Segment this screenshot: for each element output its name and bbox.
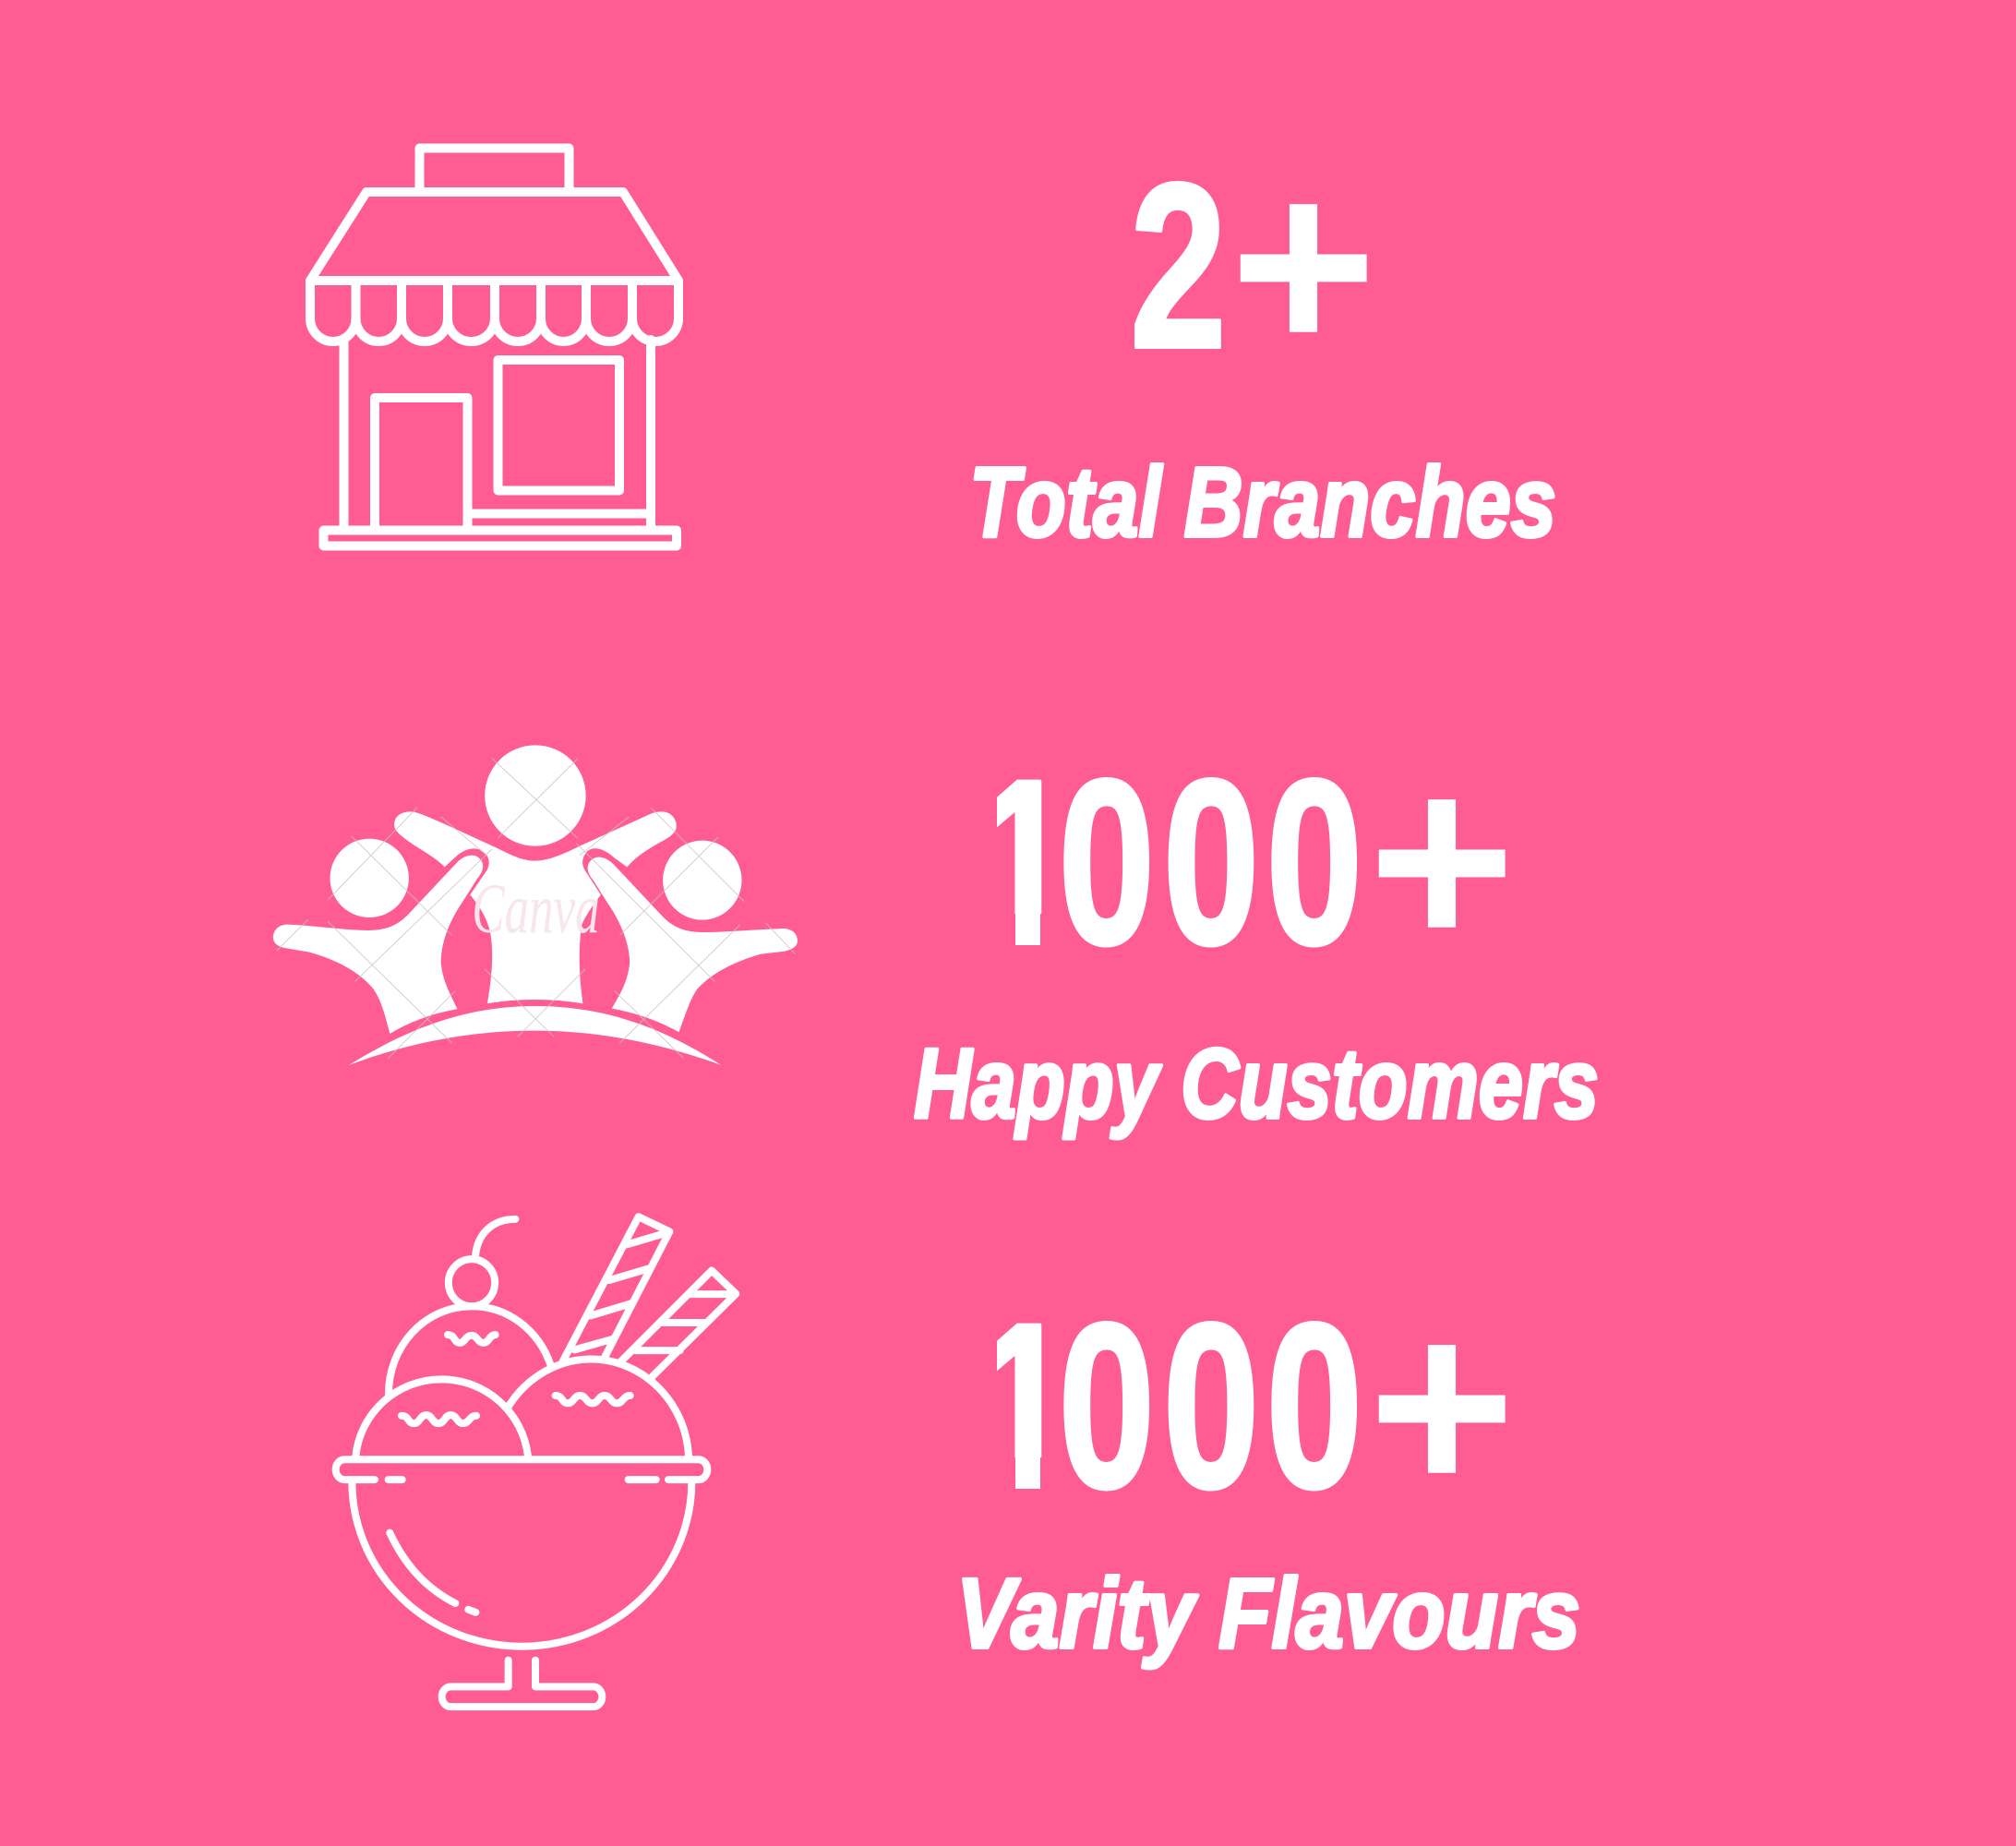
watermark text: Canva xyxy=(472,870,600,948)
stat: variety flavours number: 1000 xyxy=(976,1274,1362,1538)
stat: variety flavours number xyxy=(997,1321,1506,1492)
stat: happy customers number xyxy=(997,777,1506,947)
icon: ice cream sundae xyxy=(336,1217,736,1707)
watermark lines xyxy=(277,759,795,1059)
label: variety flavours: Varity Flavours xyxy=(956,1557,1580,1669)
stat: total branches number: + xyxy=(1230,124,1377,405)
stat: happy customers number: + xyxy=(1368,719,1516,1001)
icon: happy customers xyxy=(273,745,798,1065)
stat: total branches number xyxy=(1130,124,1377,405)
stat: variety flavours number: + xyxy=(1368,1265,1516,1546)
stat: happy customers number: 1000 xyxy=(976,730,1362,994)
icon: storefront xyxy=(310,148,678,546)
stat: total branches number: 2 xyxy=(1130,134,1227,398)
label: happy customers: Happy Customers xyxy=(914,1027,1599,1139)
label: total branches: Total Branches xyxy=(969,446,1556,557)
